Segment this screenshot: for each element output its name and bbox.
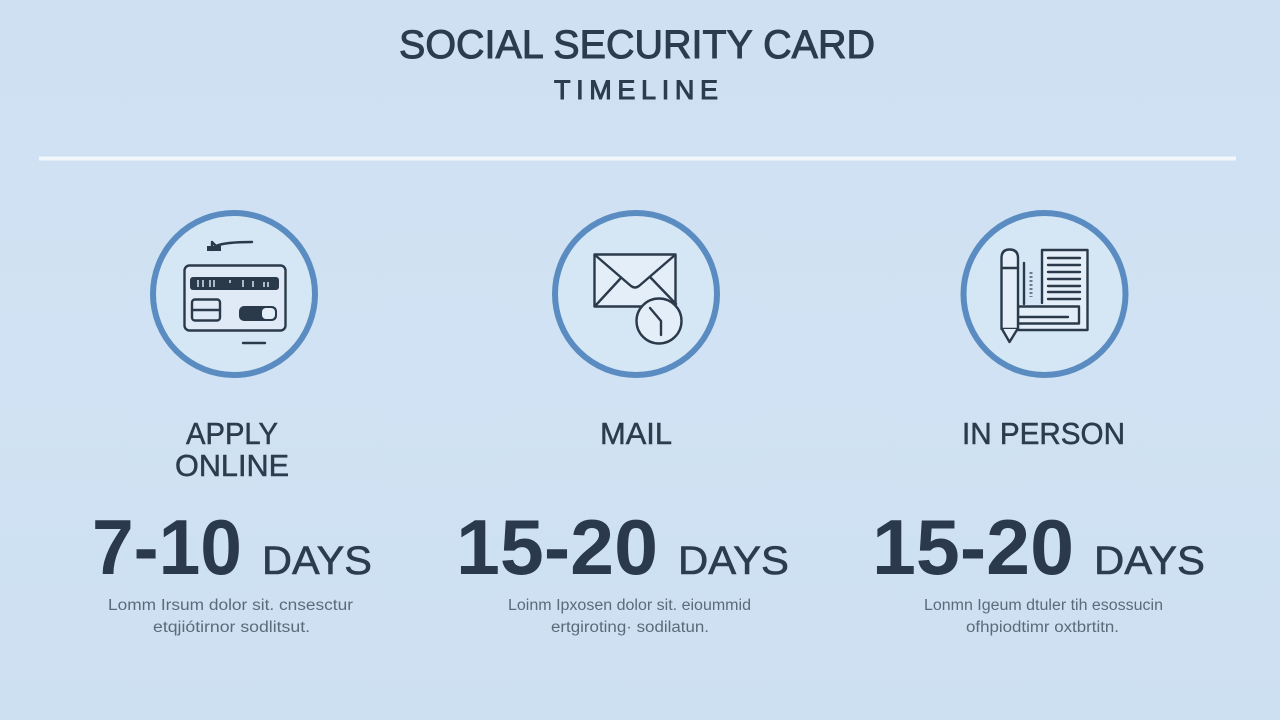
duration: 7-10 days: 7-10 xyxy=(92,503,242,591)
duration: 15-20 days xyxy=(456,503,789,591)
description text xyxy=(508,597,751,636)
heading: main title: SOCIAL SECURITY CARD xyxy=(399,23,875,67)
description text: ertgiroting· sodilatun. xyxy=(551,619,709,636)
panel: in person xyxy=(872,213,1205,636)
description text: Lonmn Igeum dtuler tih esossucin xyxy=(924,597,1163,614)
description text: ofhpiodtimr oxtbrtitn. xyxy=(966,619,1119,636)
description text xyxy=(924,597,1163,636)
icon: pencil and document xyxy=(964,213,1126,375)
label: apply online xyxy=(175,416,289,483)
label: apply online: APPLY xyxy=(186,416,278,451)
duration: 15-20 days xyxy=(872,503,1205,591)
description text: Loinm Ipxosen dolor sit. eioummid xyxy=(508,597,751,614)
description text: Lomm Irsum dolor sit. cnsesctur xyxy=(108,597,353,614)
panel: mail xyxy=(456,213,789,636)
duration: 15-20 days: DAYS xyxy=(678,539,789,583)
description text: etqjiótirnor sodlitsut. xyxy=(153,619,310,636)
duration: 15-20 days: DAYS xyxy=(1094,539,1205,583)
label: apply online: ONLINE xyxy=(175,448,289,483)
description text xyxy=(108,597,353,636)
duration: 7-10 days: DAYS xyxy=(262,539,372,583)
label: in person: IN PERSON xyxy=(962,416,1125,451)
heading: subtitle: TIMELINE xyxy=(554,75,718,105)
label: mail: MAIL xyxy=(600,416,672,451)
icon: envelope with clock xyxy=(555,213,717,375)
duration: 7-10 days xyxy=(92,503,372,591)
icon: online application card xyxy=(153,213,315,375)
duration: 15-20 days: 15-20 xyxy=(872,503,1074,591)
title xyxy=(399,23,875,105)
panel: apply online xyxy=(92,213,372,636)
duration: 15-20 days: 15-20 xyxy=(456,503,658,591)
